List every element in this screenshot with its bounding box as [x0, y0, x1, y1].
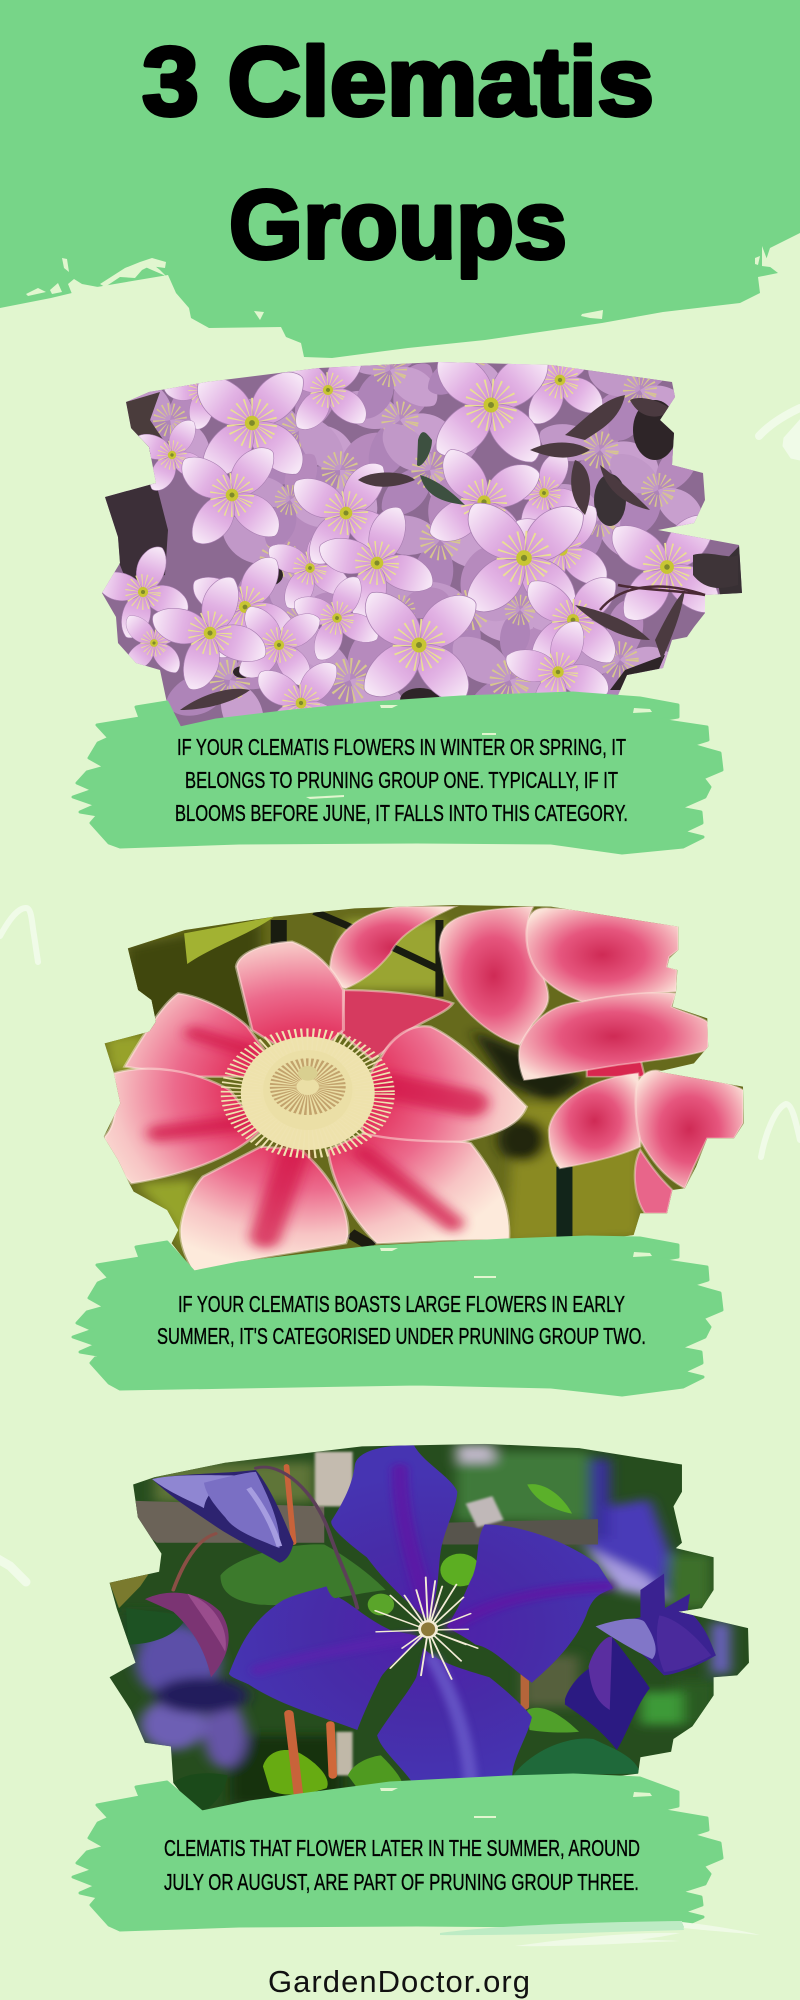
- leaf: [184, 917, 274, 964]
- body text two: IF YOUR CLEMATIS BOASTS LARGE FLOWERS IN EARLY: [178, 1291, 625, 1317]
- stamens: [241, 1037, 375, 1150]
- leaves: [126, 1484, 640, 1812]
- main flowers: [102, 362, 718, 712]
- photo: pink clematis montana cluster: [102, 362, 742, 726]
- stems: [314, 912, 444, 972]
- stamens: [375, 1577, 478, 1679]
- body text one: BLOOMS BEFORE JUNE, IT FALLS INTO THIS CATEGORY.: [175, 800, 628, 826]
- big violet flower: [229, 1445, 613, 1785]
- seed head left: [110, 1573, 150, 1608]
- red petal stripes: [158, 1033, 471, 1237]
- petal veins: [258, 1470, 607, 1779]
- large flower petals: [105, 942, 526, 1272]
- dark foliage: [180, 395, 738, 710]
- text banner three: [73, 1775, 760, 1946]
- right side flower: [565, 1574, 716, 1750]
- magenta bud: [145, 1593, 229, 1677]
- header brush panel: [0, 0, 800, 358]
- body text one: [175, 734, 628, 826]
- body text three: [164, 1835, 640, 1895]
- stems: [173, 1466, 525, 1794]
- footer website label: GardenDoctor.org: [268, 1964, 530, 1999]
- body text three: JULY OR AUGUST, ARE PART OF PRUNING GROUP THREE.: [164, 1869, 639, 1895]
- photo: purple clematis: [107, 1441, 754, 1815]
- photo: pink and white large clematis: [100, 903, 747, 1273]
- decorative white brush strokes: [0, 408, 800, 1582]
- text banner one: [73, 693, 722, 853]
- dim background flowers: [130, 362, 701, 718]
- upper right petals: [330, 907, 743, 1213]
- dark gaps and leaves: [105, 384, 742, 700]
- title: Groups: [229, 170, 567, 279]
- title: [142, 27, 654, 279]
- text banner two: [73, 1237, 722, 1395]
- body text one: BELONGS TO PRUNING GROUP ONE. TYPICALLY, IF IT: [185, 767, 618, 793]
- body text one: IF YOUR CLEMATIS FLOWERS IN WINTER OR SPRING, IT: [177, 734, 626, 760]
- title: 3 Clematis: [142, 27, 654, 136]
- trellis: [136, 1501, 324, 1543]
- pale brush streak: [440, 1921, 760, 1946]
- upper left closed flower: [152, 1470, 294, 1563]
- body text two: [157, 1291, 646, 1349]
